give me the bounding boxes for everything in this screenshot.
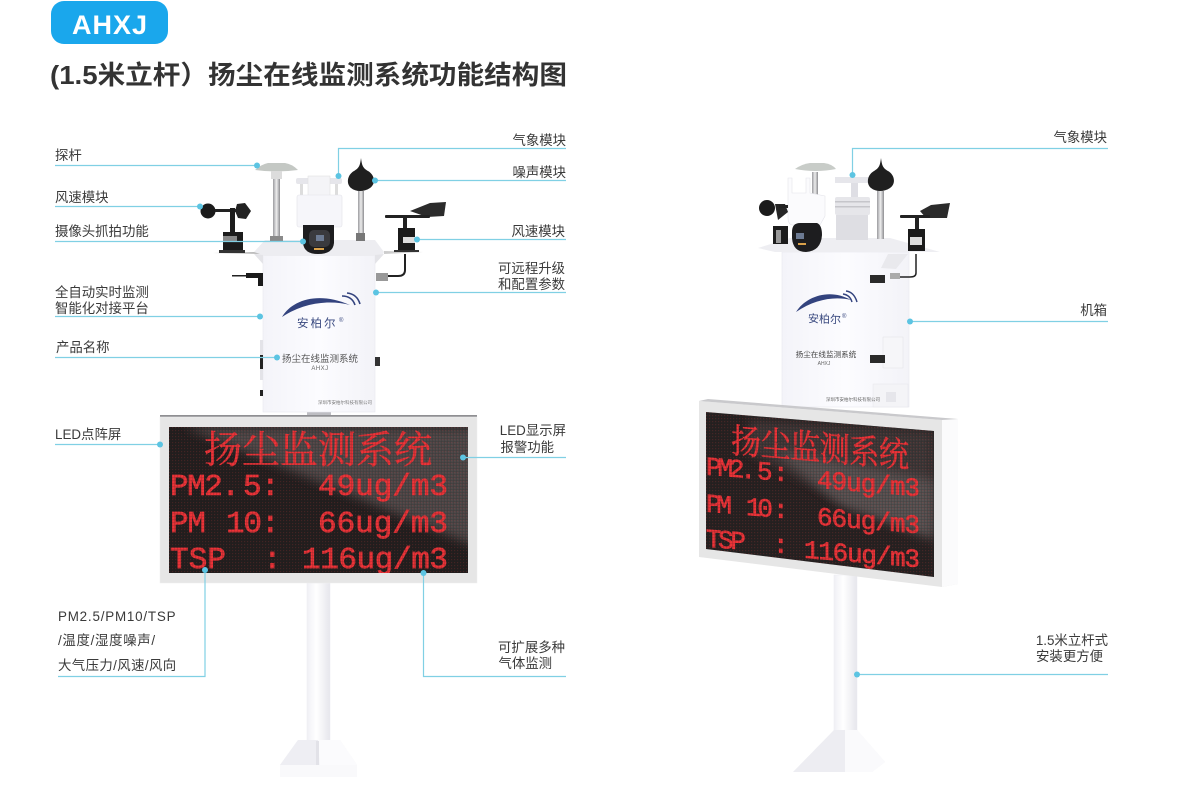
callout: 气象模块 xyxy=(336,133,566,179)
callout: monitored parameters: /温度/湿度噪声/ xyxy=(58,633,156,648)
LED screen content: 66ug/m3 xyxy=(817,503,920,541)
camera xyxy=(297,195,342,254)
callout: 可扩展多种气体监测: 气体监测 xyxy=(498,656,552,671)
callout: 1.5米立杆式 安装更方便 xyxy=(854,633,1108,678)
LED screen content: : xyxy=(261,507,280,542)
callout: 摄像头抓拍功能: 摄像头抓拍功能 xyxy=(55,224,149,239)
callout: 气象模块 right unit: 气象模块 xyxy=(1053,130,1107,145)
callout: 产品名称 xyxy=(55,340,280,360)
LED screen content: 66ug/m3 xyxy=(318,507,448,542)
callout: 可远程升级 和配置参数: 和配置参数 xyxy=(498,276,566,292)
logo xyxy=(796,291,857,326)
callout: LED显示屏 报警功能 xyxy=(460,423,566,460)
callout: 可远程升级 和配置参数 xyxy=(373,261,566,296)
callout: LED显示屏 报警功能: LED显示屏 xyxy=(500,423,566,438)
LED screen content: 5 xyxy=(243,470,262,505)
LED screen content xyxy=(706,412,934,577)
callout: 产品名称: 产品名称 xyxy=(56,340,110,355)
wind vane xyxy=(376,202,446,281)
callout: 风速模块 right: 风速模块 xyxy=(511,224,565,239)
callout: 探杆 xyxy=(55,148,260,168)
callout: 噪声模块 xyxy=(372,165,566,184)
callout: monitored parameters: 大气压力/风速/风向 xyxy=(58,658,177,673)
callout: 可扩展多种气体监测 xyxy=(420,570,566,676)
LED screen frame xyxy=(699,399,958,587)
cabinet: AHXJ xyxy=(311,366,329,372)
probe rod xyxy=(795,163,836,202)
wind cups xyxy=(200,203,263,286)
weather module bracket xyxy=(296,176,342,196)
weather module xyxy=(835,177,875,240)
callout: 全自动实时监测 智能化对接平台 xyxy=(55,284,263,320)
pole base xyxy=(793,730,885,772)
LED screen content: PM2. xyxy=(170,470,240,505)
badge: AHXJ xyxy=(51,1,168,44)
cabinet xyxy=(260,255,380,412)
cabinet xyxy=(782,252,909,407)
cabinet: 深圳市安柏尔科技有限公司 xyxy=(826,396,880,403)
LED screen content: 10 xyxy=(226,507,262,542)
LED screen content: : xyxy=(773,495,789,526)
badge: AHXJ: AHXJ xyxy=(72,10,148,40)
LED screen content: 49ug/m3 xyxy=(318,470,448,505)
pole base xyxy=(280,740,357,777)
callout: 风速模块 left: 风速模块 xyxy=(55,190,109,205)
wind vane xyxy=(890,203,950,279)
LED screen content: 扬尘监测系统 xyxy=(731,414,910,478)
LED screen content: PM xyxy=(706,490,732,522)
callout: monitored parameters xyxy=(58,567,208,676)
mount block xyxy=(307,410,331,416)
callout: monitored parameters: PM2.5/PM10/TSP xyxy=(58,609,176,624)
callout: 全自动实时监测 智能化对接平台: 全自动实时监测 xyxy=(55,284,149,300)
callout: LED点阵屏 xyxy=(55,427,163,448)
LED screen content: : xyxy=(263,543,282,578)
callout: LED显示屏 报警功能: 报警功能 xyxy=(500,440,554,455)
callout: 机箱 xyxy=(907,303,1108,324)
roof xyxy=(758,238,940,269)
LED screen content: : xyxy=(773,458,789,489)
noise sensor xyxy=(348,158,374,241)
LED screen content: : xyxy=(261,470,280,505)
LED screen content: : xyxy=(773,530,789,561)
callout: 探杆: 探杆 xyxy=(55,148,82,163)
callout: 机箱: 机箱 xyxy=(1080,303,1107,318)
callout: 气象模块 right unit xyxy=(850,130,1108,178)
LED screen frame xyxy=(160,415,477,583)
noise sensor xyxy=(868,158,894,239)
callout: 风速模块 right xyxy=(414,224,566,242)
callout: 可远程升级 和配置参数: 可远程升级 xyxy=(498,261,565,276)
callout: 噪声模块: 噪声模块 xyxy=(512,165,566,180)
cabinet: 扬尘在线监测系统 xyxy=(282,353,358,365)
callout: 可扩展多种气体监测: 可扩展多种 xyxy=(498,639,565,655)
LED screen content: TSP xyxy=(706,525,746,558)
pole xyxy=(834,575,857,731)
callout: 风速模块 left xyxy=(55,190,203,210)
LED screen content: TSP xyxy=(170,543,226,578)
callout: 摄像头抓拍功能 xyxy=(55,224,306,244)
LED screen content: 116ug/m3 xyxy=(302,543,448,578)
LED screen content: PM2. xyxy=(706,453,756,487)
camera xyxy=(788,178,825,252)
pole xyxy=(307,583,330,741)
callout: 1.5米立杆式 安装更方便: 安装更方便 xyxy=(1036,649,1103,664)
logo: ® xyxy=(842,313,847,320)
logo: ® xyxy=(339,317,344,324)
LED screen content: 扬尘监测系统 xyxy=(204,419,432,474)
callout: LED点阵屏: LED点阵屏 xyxy=(55,427,121,442)
device: left monitoring station xyxy=(160,158,480,777)
LED screen content: PM xyxy=(170,507,206,542)
LED screen content: 10 xyxy=(746,493,773,525)
callout: 1.5米立杆式 安装更方便: 1.5米立杆式 xyxy=(1036,633,1108,648)
logo xyxy=(282,293,360,330)
logo: 安柏尔 xyxy=(297,316,338,330)
callout: 气象模块: 气象模块 xyxy=(512,133,566,148)
LED screen content: 5 xyxy=(757,457,773,488)
roof xyxy=(213,240,423,264)
wind cups xyxy=(759,200,788,244)
device: right monitoring station xyxy=(699,158,958,772)
title: (1.5米立杆）扬尘在线监测系统功能结构图 xyxy=(50,60,567,90)
probe rod xyxy=(255,163,298,241)
cabinet: 深圳市安柏尔科技有限公司 xyxy=(318,399,372,406)
cabinet: AHXJ xyxy=(818,361,831,367)
cabinet: 扬尘在线监测系统 xyxy=(796,349,857,359)
LED screen content: 49ug/m3 xyxy=(817,466,920,504)
LED screen content: 116ug/m3 xyxy=(804,536,920,575)
logo: 安柏尔 xyxy=(808,311,841,326)
callout: 全自动实时监测 智能化对接平台: 智能化对接平台 xyxy=(55,300,149,316)
LED screen content xyxy=(169,427,468,573)
